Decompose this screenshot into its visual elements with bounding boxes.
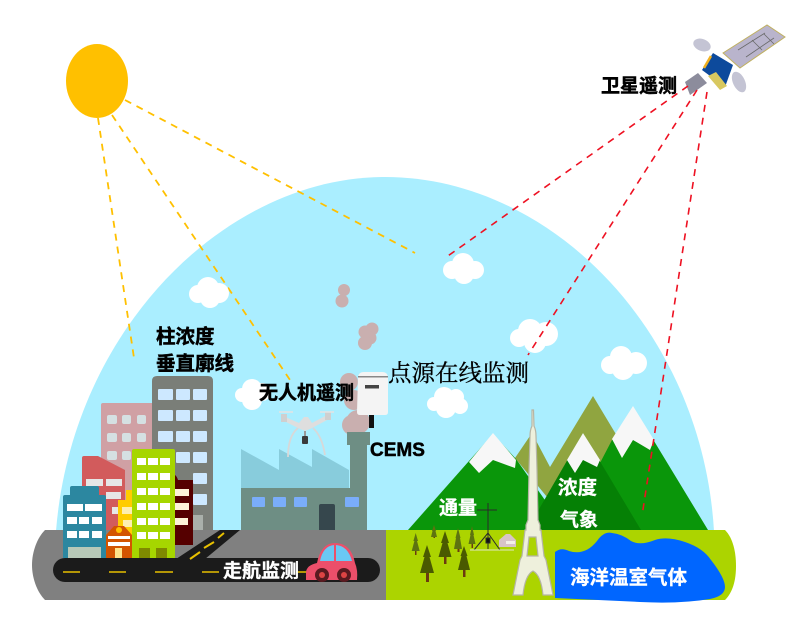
satellite dashed lines (445, 86, 707, 516)
orange shop (106, 526, 132, 558)
maroon building (165, 472, 193, 545)
label: drone remote sensing: 无人机遥测 (259, 382, 354, 404)
label: ocean greenhouse gases: 海洋温室气体 (570, 566, 688, 589)
sunlight dashed lines (98, 100, 415, 380)
car (306, 543, 357, 582)
Eiffel tower (513, 410, 553, 595)
factory smoke (336, 284, 378, 435)
ground: city road base (32, 530, 387, 600)
CEMS device (357, 372, 388, 428)
label: concentration: 浓度 (558, 476, 597, 499)
label: meteorology: 气象 (560, 509, 598, 531)
pink building (101, 403, 152, 530)
sun (66, 44, 128, 118)
flux tower (470, 503, 514, 550)
sky dome (56, 177, 714, 531)
label: point source online monitoring: 点源在线监测 (388, 360, 529, 387)
small house (499, 534, 516, 547)
label: flux: 通量 (439, 497, 477, 519)
red building (82, 456, 125, 530)
teal building (63, 486, 106, 558)
drone (279, 412, 334, 457)
ocean (555, 533, 725, 603)
label: column concentration and vertical profile (156, 325, 234, 375)
ground: grassland (386, 530, 736, 600)
trees (412, 525, 476, 582)
lime building (132, 449, 175, 558)
label: satellite remote sensing: 卫星遥测 (601, 75, 677, 97)
mountains (408, 396, 708, 530)
satellite (685, 25, 785, 95)
factory (241, 432, 370, 530)
road (53, 530, 380, 582)
label: CEMS: CEMS (370, 440, 425, 461)
clouds (189, 253, 647, 418)
yellow building (118, 490, 135, 535)
label: column concentration and vertical profile: 垂直廓线 (156, 353, 234, 375)
label: column concentration and vertical profile: 柱浓度 (156, 325, 215, 348)
label: mobile monitoring: 走航监测 (223, 559, 299, 582)
city buildings (63, 376, 213, 558)
grey tower (152, 376, 213, 530)
